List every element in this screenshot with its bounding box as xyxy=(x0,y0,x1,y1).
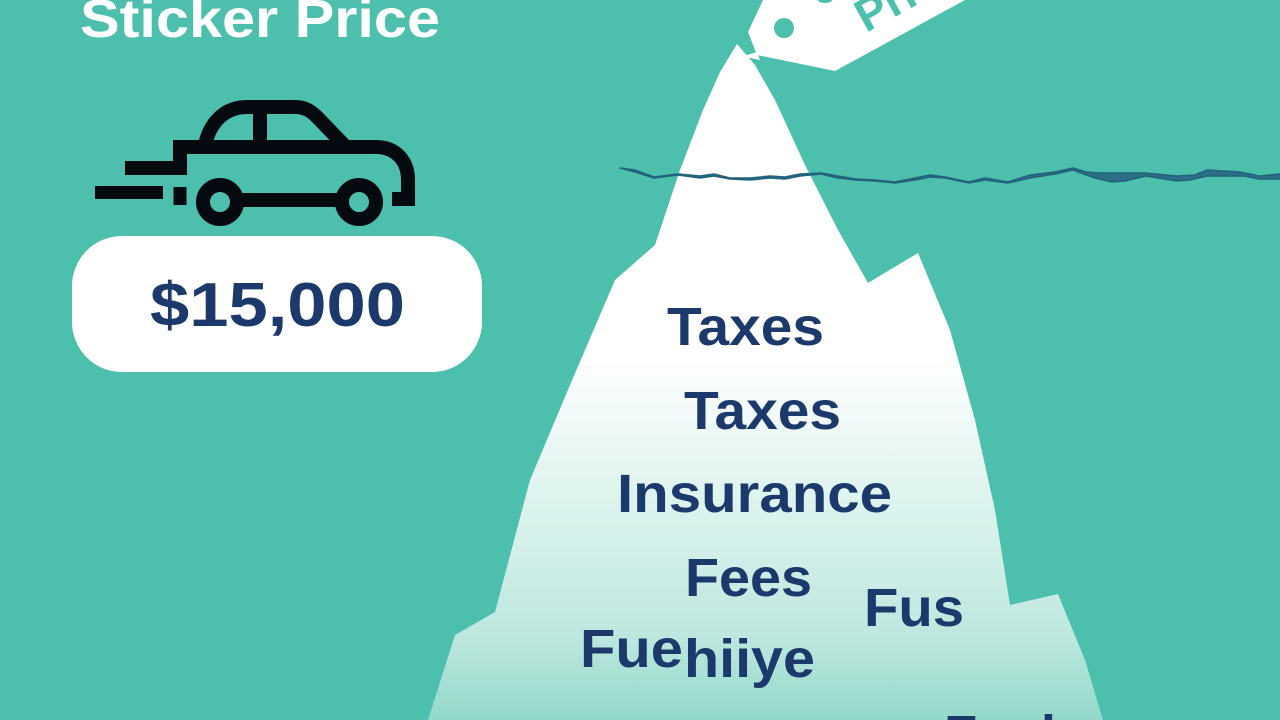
tag hole xyxy=(774,18,794,38)
waterline xyxy=(620,168,1280,183)
cost label: garbled fuel: Fue xyxy=(580,619,683,679)
tag string xyxy=(740,52,760,60)
cost label: garbled fuel: hiiye xyxy=(684,629,815,689)
tag mark xyxy=(818,0,832,3)
price pill xyxy=(72,236,482,372)
cost label: taxes repeated: Taxes xyxy=(684,381,841,441)
cost label: fees: Fees xyxy=(685,548,812,608)
iceberg xyxy=(428,44,1103,720)
cost label: garbled fuel xyxy=(580,619,815,689)
cost label: fus: Fus xyxy=(864,578,964,638)
cost label: insurance: Insurance xyxy=(617,464,892,524)
price tag xyxy=(740,0,969,71)
price value: $15,000 xyxy=(150,271,405,340)
icon: speeding car xyxy=(95,107,408,219)
cost label: taxes: Taxes xyxy=(667,297,824,357)
